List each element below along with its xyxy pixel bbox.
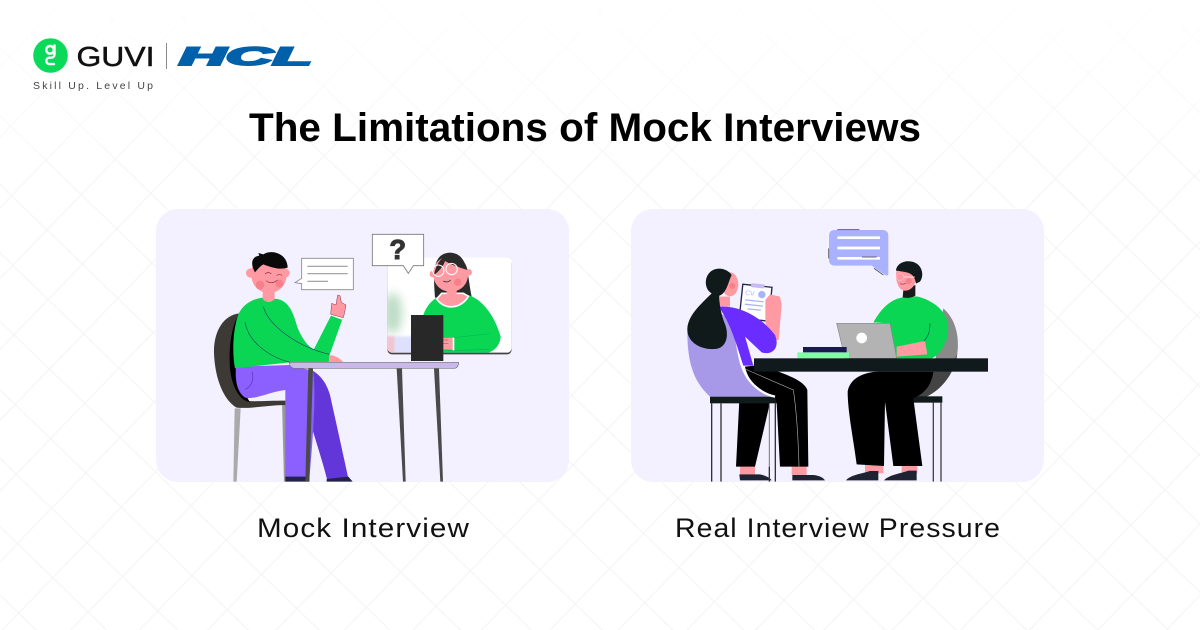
right chair and stool [879, 308, 958, 482]
GUVI wordmark: GUVI [76, 41, 154, 72]
illustration: real interview scene [687, 230, 988, 482]
laptop and books [797, 323, 897, 358]
chair [214, 313, 286, 482]
icon: GUVI green circle [33, 38, 68, 73]
illustration: mock interview scene [214, 234, 512, 482]
man upper body [233, 252, 346, 368]
speech bubble: lines [295, 258, 353, 290]
table legs back [397, 368, 443, 482]
tablet [411, 315, 443, 361]
tagline: Skill Up. Level Up [33, 80, 153, 92]
speech bubble: question mark [372, 234, 424, 273]
man [846, 261, 948, 480]
table [289, 362, 459, 482]
title: The Limitations of Mock Interviews [249, 106, 921, 150]
speech bubble: question mark: ? [389, 234, 406, 265]
video call window with interviewer [383, 253, 512, 356]
clipboard CV: CV [745, 290, 755, 298]
woman thigh [722, 312, 808, 467]
HCL wordmark: HCL [179, 43, 312, 71]
label: real interview pressure: Real Interview Pressure [675, 513, 1001, 543]
woman lower legs and shoes [736, 400, 825, 480]
man trousers [236, 365, 353, 482]
panel: real interview pressure [631, 209, 1044, 482]
woman chair and stool [687, 312, 777, 482]
speech bubble [829, 230, 888, 276]
table [754, 358, 988, 372]
label: mock interview: Mock Interview [257, 513, 470, 543]
clipboard CV [739, 282, 772, 321]
panel: mock interview [156, 209, 569, 482]
woman upper body [687, 269, 782, 366]
logo: GUVI and HCL [33, 38, 312, 92]
